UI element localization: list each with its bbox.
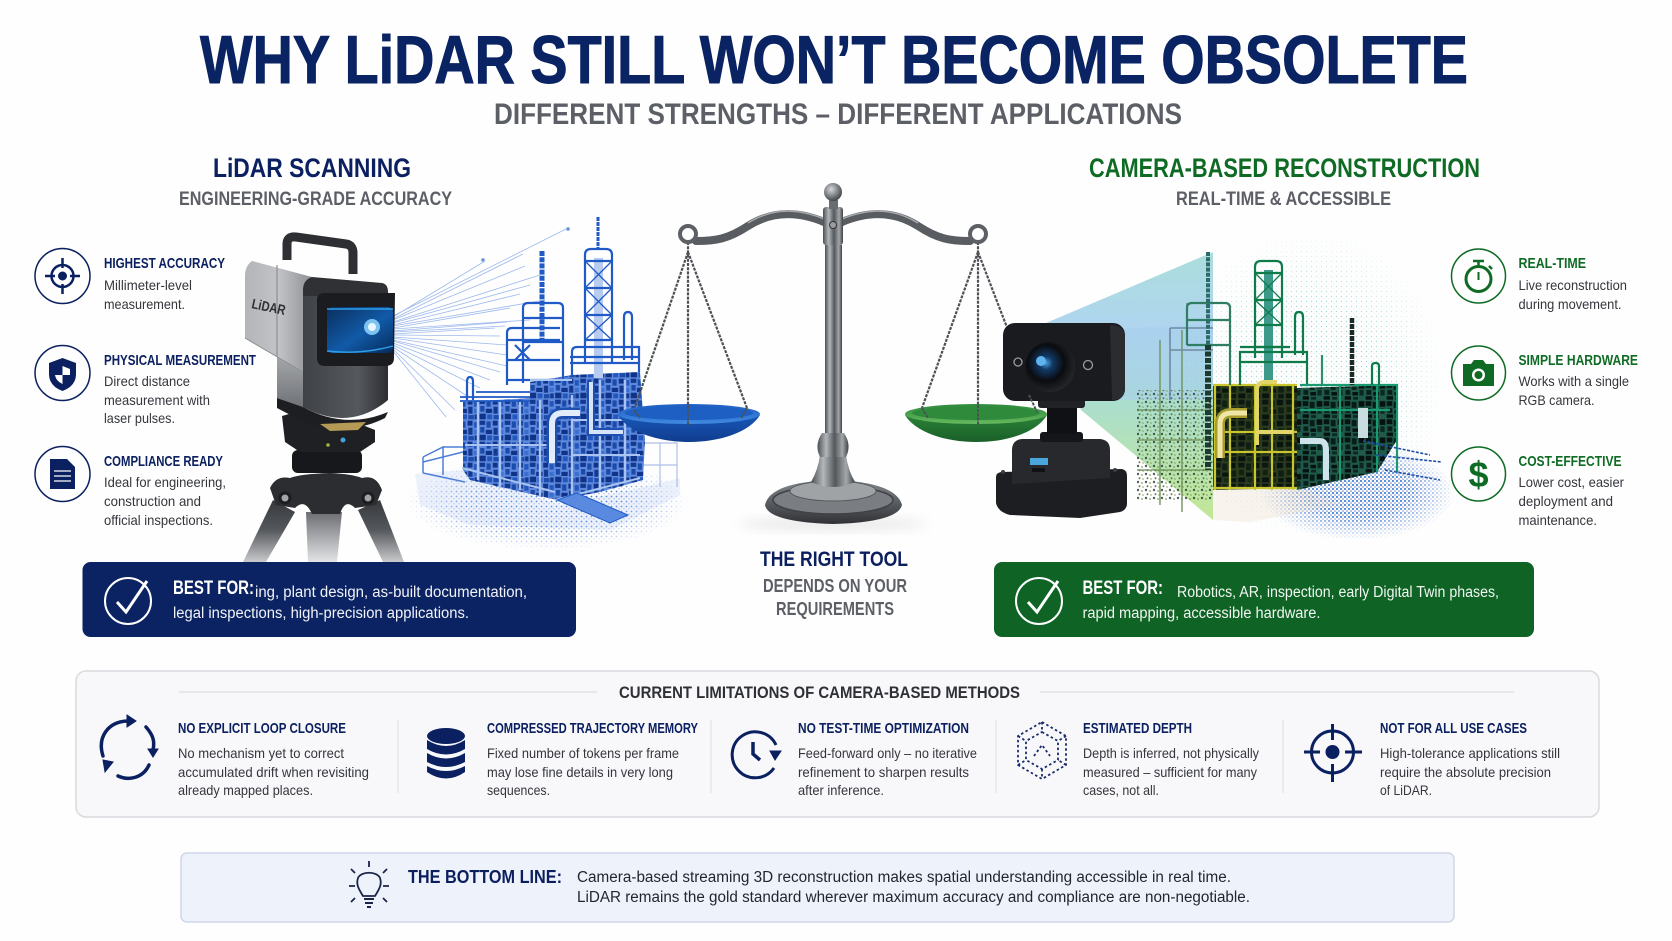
text: no explicit loop closure: already mapped places.: [178, 782, 313, 798]
text: physical measurement: [104, 352, 256, 426]
text: compliance ready: construction and: [104, 493, 201, 509]
balance scale: [618, 183, 1008, 529]
pipes: [1220, 413, 1247, 458]
silver side: [245, 261, 312, 407]
laser beams: [393, 227, 570, 417]
text: highest accuracy: Millimeter-level: [104, 277, 192, 293]
heading: LiDAR scanning: [179, 153, 452, 210]
text: the right tool: THE RIGHT TOOL: [760, 548, 908, 571]
subtitle: DIFFERENT STRENGTHS – DIFFERENT APPLICATIONS: [494, 98, 1182, 131]
text: simple hardware: Works with a single: [1518, 373, 1629, 389]
text: highest accuracy: measurement.: [104, 296, 185, 312]
text: no explicit loop closure: [178, 720, 369, 798]
icon: light bulb: [349, 861, 389, 907]
icon: check: [1016, 578, 1062, 624]
left chains: [634, 242, 747, 425]
base: [765, 480, 902, 524]
icon: stopwatch: [1452, 249, 1506, 303]
text: estimated depth: measured – sufficient for many: [1083, 764, 1257, 780]
right features: [1452, 249, 1638, 528]
text: compliance ready: Ideal for engineering,: [104, 474, 226, 490]
icon: database: [427, 728, 465, 778]
text: physical measurement: measurement with: [104, 392, 210, 408]
panel: bottom line: LiDAR remains the gold standard wherever maximum accuracy and compliance are non-negotiable.: [577, 889, 1250, 906]
heading: camera-based reconstruction: [1089, 153, 1480, 210]
green towers: [1187, 261, 1397, 480]
text: not for all use cases: require the absolute precision: [1380, 764, 1551, 780]
text: compressed trajectory memory: COMPRESSED TRAJECTORY MEMORY: [487, 720, 698, 737]
faded right frame: [643, 443, 677, 487]
head: [1003, 323, 1125, 401]
text: cost-effective: Lower cost, easier: [1518, 474, 1624, 490]
left features: [35, 248, 256, 528]
icon: check: [105, 578, 151, 624]
text: no test-time optimization: [798, 720, 977, 798]
icon: shield: [35, 346, 90, 400]
panel: bottom line: THE BOTTOM LINE:: [408, 867, 562, 887]
text: simple hardware: RGB camera.: [1518, 392, 1594, 408]
lens housing: [317, 293, 395, 366]
panel: camera best for: [994, 562, 1534, 637]
text: no test-time optimization: NO TEST-TIME OPTIMIZATION: [798, 720, 969, 737]
text: no test-time optimization: refinement to sharpen results: [798, 764, 969, 780]
handle: [287, 237, 353, 274]
heading: camera-based reconstruction: REAL-TIME & ACCESSIBLE: [1176, 189, 1391, 210]
towers and frames: [460, 217, 640, 401]
panel: LiDAR best for: [82, 562, 576, 637]
dense mass: [463, 372, 645, 500]
icon: loop arrows: [101, 715, 158, 778]
text: highest accuracy: HIGHEST ACCURACY: [104, 255, 225, 272]
scale shadow: [738, 519, 928, 529]
dark body: [303, 277, 388, 300]
text: compressed trajectory memory: may lose fine details in very long: [487, 764, 673, 780]
post: [825, 245, 842, 440]
text: estimated depth: [1083, 720, 1259, 798]
panel: bottom line: [181, 853, 1454, 922]
beam: [696, 214, 824, 241]
tripod hub: [270, 473, 382, 514]
text: no explicit loop closure: No mechanism yet to correct: [178, 745, 344, 761]
blue pan: [618, 415, 760, 442]
text: not for all use cases: [1380, 720, 1560, 798]
neck: [1040, 432, 1083, 442]
text: compliance ready: COMPLIANCE READY: [104, 453, 223, 470]
heading: LiDAR scanning: ENGINEERING-GRADE ACCURACY: [179, 189, 452, 210]
rings: [680, 226, 696, 242]
green pan: [905, 395, 1047, 442]
text: compliance ready: official inspections.: [104, 512, 213, 528]
text: no test-time optimization: Feed-forward only – no iterative: [798, 745, 977, 761]
icon: dollar: $: [1468, 454, 1489, 495]
icon: clock: [732, 732, 781, 778]
point cloud: LiDAR refinery: [405, 217, 690, 550]
text: highest accuracy: [104, 255, 225, 312]
text: real-time: during movement.: [1518, 296, 1622, 312]
floor lines: [1363, 441, 1442, 480]
text: the right tool: DEPENDS ON YOUR: [763, 576, 907, 596]
panel: camera best for: rapid mapping, accessible hardware.: [1082, 605, 1320, 622]
text: compressed trajectory memory: Fixed number of tokens per frame: [487, 745, 679, 761]
icon: document: [35, 446, 90, 502]
text: compressed trajectory memory: [487, 720, 698, 798]
text: real-time: Live reconstruction: [1518, 277, 1627, 293]
central dark masses: [1213, 385, 1297, 490]
panel: current limitations: [76, 671, 1599, 817]
brand mark: LiDAR: [250, 296, 287, 318]
heading: camera-based reconstruction: CAMERA-BASED RECONSTRUCTION: [1089, 153, 1480, 183]
text: not for all use cases: NOT FOR ALL USE CASES: [1380, 720, 1527, 737]
body: [1012, 439, 1110, 484]
text: physical measurement: Direct distance: [104, 373, 190, 389]
point cloud: camera refinery: [1137, 225, 1455, 545]
text: physical measurement: PHYSICAL MEASUREMENT: [104, 352, 256, 369]
text: simple hardware: [1518, 352, 1638, 408]
tripod legs: [306, 512, 342, 562]
text: cost-effective: deployment and: [1518, 493, 1613, 509]
text: cost-effective: [1518, 453, 1624, 528]
text: no test-time optimization: after inference.: [798, 782, 884, 798]
text: real-time: REAL-TIME: [1518, 255, 1586, 272]
text: real-time: [1518, 255, 1627, 312]
text: no explicit loop closure: accumulated drift when revisiting: [178, 764, 369, 780]
text: compliance ready: [104, 453, 226, 528]
base: [996, 469, 1127, 518]
panel: bottom line: Camera-based streaming 3D reconstruction makes spatial understanding accessible in real time.: [577, 869, 1231, 886]
heading: CURRENT LIMITATIONS OF CAMERA-BASED METHODS: [619, 683, 1020, 702]
text: compressed trajectory memory: sequences.: [487, 782, 550, 798]
mount: [292, 450, 362, 473]
icon: dollar: [1452, 447, 1506, 501]
text: estimated depth: ESTIMATED DEPTH: [1083, 720, 1192, 737]
icon: camera: [1452, 346, 1506, 400]
left railing: [423, 447, 465, 482]
panel: LiDAR best for: legal inspections, high-precision applications.: [173, 605, 469, 622]
icon: hexagon wireframe: [1018, 722, 1066, 779]
floor dots: [409, 466, 687, 549]
text: no explicit loop closure: NO EXPLICIT LOOP CLOSURE: [178, 720, 346, 737]
faded left mass inside cone: [1137, 390, 1213, 500]
panel: camera best for: BEST FOR:: [1082, 578, 1163, 599]
base plate: [557, 493, 628, 523]
LiDAR scanner on tripod: [243, 237, 404, 562]
text: simple hardware: SIMPLE HARDWARE: [1518, 352, 1638, 369]
text: estimated depth: cases, not all.: [1083, 782, 1159, 798]
icon: crosshair: [1304, 724, 1362, 782]
camera cone of view: [1046, 252, 1213, 520]
webcam camera: [996, 323, 1127, 518]
panel: LiDAR best for: BEST FOR:: [173, 578, 254, 599]
yellow frame: [1213, 385, 1297, 490]
right chains upper: [922, 242, 1008, 425]
text: cost-effective: maintenance.: [1518, 512, 1597, 528]
text: not for all use cases: High-tolerance applications still: [1380, 745, 1560, 761]
panel: LiDAR best for: ing, plant design, as-built documentation,: [255, 584, 527, 601]
text: cost-effective: COST-EFFECTIVE: [1518, 453, 1622, 470]
light framing: [462, 380, 640, 500]
icon: target: [35, 248, 90, 304]
panel: camera best for: Robotics, AR, inspection, early Digital Twin phases,: [1177, 584, 1499, 601]
text: physical measurement: laser pulses.: [104, 410, 175, 426]
text: not for all use cases: of LiDAR.: [1380, 782, 1432, 798]
heading: LiDAR scanning: LiDAR SCANNING: [213, 153, 411, 183]
text: estimated depth: Depth is inferred, not physically: [1083, 745, 1259, 761]
text: the right tool: [760, 548, 908, 619]
text: the right tool: REQUIREMENTS: [776, 599, 894, 619]
pipes: [552, 413, 580, 463]
lens: [1025, 342, 1075, 392]
